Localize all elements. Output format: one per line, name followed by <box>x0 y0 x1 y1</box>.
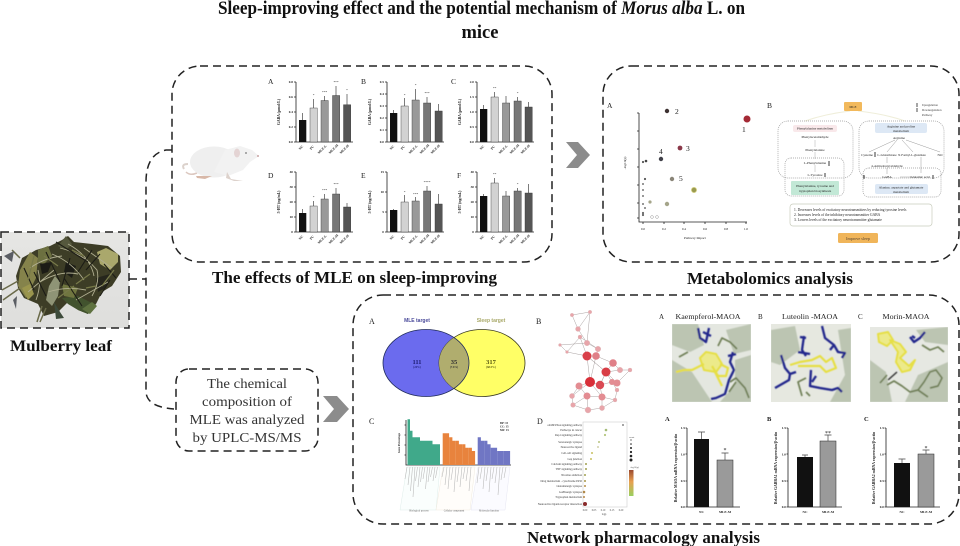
pathway diagram: 1. Decreases levels of excitatory neurotransmitters by reducing tyrosine levels <box>794 208 907 212</box>
bar chart: A GABA: MLE-H <box>339 143 350 155</box>
bar chart: GABRA1 expression: B <box>767 416 772 423</box>
venn diagram: MLE target <box>404 318 430 324</box>
KEGG dot plot: Neuroactive ligand <box>561 446 583 449</box>
bar chart: C GABA: MLE-H <box>520 143 531 155</box>
KEGG dot plot: Cell-cell signaling <box>561 452 583 455</box>
bar chart: GABRA1 expression: 1.0 <box>782 452 786 456</box>
pathway diagram: Glutamic acid <box>910 175 930 179</box>
bar chart: MAOA expression: NC <box>699 510 704 514</box>
bar chart: C GABA: NC <box>479 144 486 151</box>
pathway diagram: MLE <box>849 105 857 109</box>
KEGG dot plot: D <box>537 417 543 426</box>
pathway diagram: Phenylalanine metabolism <box>797 126 833 130</box>
pathway diagram: 2. Increases levels of the inhibitory neurotransmitter GABA <box>794 213 881 217</box>
bar chart: GABRA1 expression: 0.5 <box>782 479 786 483</box>
venn diagram: 35 <box>451 359 458 366</box>
venn diagram: (24%) <box>413 366 421 369</box>
bar chart: MAOA expression: 0.5 <box>681 479 685 483</box>
pathway diagram: Phenylalanine <box>805 148 825 152</box>
docking titles: A <box>659 313 664 321</box>
bar chart: D 5-HT: D <box>268 171 274 180</box>
network graph <box>536 310 632 413</box>
pathway diagram: Pathway <box>922 113 933 117</box>
bar chart: E 5-HT: PC <box>400 234 406 241</box>
bar chart: E 5-HT: 15 <box>381 170 384 174</box>
bar chart: D 5-HT: MLE-M <box>328 233 340 245</box>
venn diagram <box>369 317 525 396</box>
network graph: B <box>536 317 541 326</box>
scatter plot: pathway impact: 2 <box>675 107 679 116</box>
KEGG dot plot: Neuroactive ligand-receptor interaction <box>538 503 583 506</box>
bar chart: A GABA: PC <box>309 144 315 151</box>
pathway diagram: L-Tyrosine <box>807 173 823 177</box>
enrichment bar chart: Biological process <box>409 510 429 512</box>
pathway diagram: B <box>767 101 772 110</box>
scatter plot: pathway impact: 1.0 <box>744 227 748 231</box>
KEGG dot plot: Glutamatergic synapse <box>556 485 583 488</box>
enrichment bar chart: CC: 15 <box>500 426 509 428</box>
bar chart: B GABA: *** <box>424 91 430 95</box>
scatter plot: pathway impact <box>607 101 750 240</box>
pathway diagram: Improve sleep <box>846 236 870 241</box>
bar chart: E 5-HT: 10 <box>381 190 384 194</box>
bar chart: C GABA: 1.5 <box>470 95 474 99</box>
pathway diagram: tryptophan biosynthesis <box>799 189 832 193</box>
scatter plot: pathway impact: A <box>607 101 613 110</box>
KEGG dot plot: Calcium signaling pathway <box>551 463 583 466</box>
bar chart: B GABA <box>361 77 444 155</box>
bar chart: GABRA2 expression: 0.0 <box>880 505 884 509</box>
pathway diagram: L-Glutathione <box>877 153 897 157</box>
KEGG dot plot: Serotonergic synapse <box>558 441 583 444</box>
bar chart: MAOA expression: 1.5 <box>681 426 685 430</box>
bar chart: B GABA: B <box>361 77 366 86</box>
bar chart: E 5-HT: *** <box>413 192 418 196</box>
bar chart: MAOA expression: 1.0 <box>681 452 685 456</box>
panel: mulberry leaf photo <box>1 232 129 328</box>
bar chart: A GABA: 0.4 <box>289 110 293 114</box>
bar chart: B GABA: GABA (μmol/L) <box>368 98 372 125</box>
bar chart: MAOA expression: MLE-M <box>719 510 732 514</box>
enrichment bar chart <box>369 417 511 512</box>
scatter plot: pathway impact: 0.2 <box>662 227 666 231</box>
bar chart: D 5-HT: 10 <box>290 215 293 219</box>
bar chart: A GABA: *** <box>322 90 327 94</box>
icon: white mouse <box>183 146 259 181</box>
bar chart: E 5-HT: MLE-M <box>419 233 431 245</box>
bar chart: B GABA: MLE-L <box>408 143 419 155</box>
venn diagram: 317 <box>486 359 497 366</box>
scatter plot: pathway impact: Pathway Impact <box>684 236 706 240</box>
docking image: kaempferol <box>672 324 751 402</box>
docking image: morin <box>870 327 948 402</box>
venn diagram: Sleep target <box>477 318 506 324</box>
bar chart: A GABA: MLE-L <box>317 143 328 155</box>
bar chart: C GABA: MLE-M <box>509 143 521 155</box>
enrichment bar chart: Gene Percentage <box>398 432 401 453</box>
bar chart: B GABA: MLE-M <box>419 143 431 155</box>
pathway diagram: Phenylalanine, tyrosine and <box>796 184 834 189</box>
docking titles: Morin-MAOA <box>882 313 930 321</box>
text block: chemical composition <box>176 369 318 451</box>
bar chart: GABRA1 expression: Relative GABRA1 mRNA expression/β-actin <box>774 431 778 504</box>
heading: effects of MLE: The effects of MLE on sleep-improving <box>212 268 498 287</box>
scatter plot: pathway impact: 0.0 <box>641 227 645 231</box>
pathway diagram: GABA <box>882 175 892 179</box>
bar chart: C GABA: PC <box>490 144 496 151</box>
bar chart: F 5-HT: MLE-M <box>509 233 521 245</box>
pathway diagram: L-Phenylalanine <box>804 161 827 165</box>
text block: chemical composition: MLE was analyzed <box>190 413 304 428</box>
KEGG dot plot: Rap1 signaling pathway <box>555 434 583 437</box>
KEGG dot plot: 0.05 <box>592 509 597 512</box>
bar chart: B GABA: 0.2 <box>380 116 384 120</box>
enrichment bar chart: C <box>369 417 374 426</box>
bar chart: C GABA: 0.5 <box>470 125 474 129</box>
text block: chemical composition: The chemical <box>207 377 287 392</box>
KEGG dot plot: 0.00 <box>583 509 588 512</box>
bar chart: A GABA: 0.8 <box>289 80 293 84</box>
bar chart: F 5-HT: * <box>517 182 519 186</box>
bar chart: D 5-HT <box>268 170 353 245</box>
bar chart: F 5-HT: PC <box>490 234 496 241</box>
bar chart: F 5-HT: 20 <box>471 200 474 204</box>
bar chart: D 5-HT: 40 <box>290 170 293 174</box>
pathway diagram: Alanine, aspartate and glutamate <box>879 186 924 190</box>
text block: chemical composition: by UPLC-MS/MS <box>192 431 302 446</box>
bar chart: E 5-HT: MLE-L <box>408 233 419 245</box>
docking titles: B <box>758 313 763 321</box>
panel: metabolomics analysis <box>603 66 959 262</box>
bar chart: GABRA1 expression: 0.0 <box>782 505 786 509</box>
bar chart: MAOA expression: * <box>724 448 726 454</box>
bar chart: A GABA: *** <box>333 80 339 84</box>
bar chart: E 5-HT: * <box>404 190 406 194</box>
pathway diagram: metabolism <box>893 190 909 194</box>
bar chart: F 5-HT: NC <box>479 234 486 241</box>
bar chart: F 5-HT: MLE-H <box>520 233 531 245</box>
KEGG dot plot: logp <box>602 513 607 516</box>
pathway diagram: N-Formyl-L-glutamate <box>898 153 926 157</box>
bar chart: F 5-HT: 40 <box>471 170 474 174</box>
bar chart: F 5-HT: F <box>457 171 461 180</box>
bar chart: A GABA: 0.0 <box>289 140 293 144</box>
bar chart: C GABA <box>451 77 534 155</box>
KEGG dot plot: Nicotine addiction <box>561 474 583 477</box>
bar chart: E 5-HT: 0 <box>382 230 384 234</box>
bar chart: D 5-HT: 20 <box>290 200 293 204</box>
bar chart: F 5-HT: MLE-L <box>498 233 509 245</box>
enrichment bar chart: Cellular component <box>444 510 465 512</box>
heading: mulberry leaf: Mulberry leaf <box>10 338 113 355</box>
bar chart: GABRA2 expression <box>864 416 940 514</box>
bar chart: GABRA2 expression: NC <box>900 510 905 514</box>
bar chart: GABRA2 expression: 1.0 <box>880 452 884 456</box>
KEGG dot plot <box>537 417 639 516</box>
bar chart: A GABA: A <box>268 77 274 86</box>
bar chart: E 5-HT: NC <box>389 234 396 241</box>
bar chart: F 5-HT: 30 <box>471 185 474 189</box>
KEGG dot plot: cAMP-PKA signaling pathway <box>547 424 583 427</box>
bar chart: A GABA: NC <box>298 144 305 151</box>
bar chart: GABRA1 expression: NC <box>803 510 808 514</box>
bar chart: F 5-HT <box>457 170 534 245</box>
docking titles <box>659 313 930 321</box>
KEGG dot plot: Drug metabolism - cytochrome P450 <box>541 480 583 483</box>
bar chart: F 5-HT: 0 <box>472 230 474 234</box>
docking titles: C <box>858 313 863 321</box>
pathway diagram: Arginine and proline <box>887 124 916 128</box>
bar chart: GABRA2 expression: 0.5 <box>880 479 884 483</box>
bar chart: B GABA: PC <box>400 144 406 151</box>
bar chart: D 5-HT: 5-HT (ng/mL) <box>277 190 281 213</box>
scatter plot: pathway impact: 1 <box>742 125 746 134</box>
heading: metabolomics analysis: Metabolomics analysis <box>687 269 854 288</box>
docking titles: Luteolin -MAOA <box>782 313 838 321</box>
scatter plot: pathway impact: 5 <box>679 174 683 183</box>
bar chart: GABRA1 expression: 1.5 <box>782 426 786 430</box>
bar chart: E 5-HT: E <box>361 171 366 180</box>
bar chart: GABRA1 expression <box>767 416 842 514</box>
enrichment bar chart: MF: 15 <box>500 429 509 432</box>
bar chart: A GABA: * <box>313 93 315 97</box>
venn diagram: A <box>369 317 375 326</box>
bar chart: GABRA1 expression: MLE-M <box>822 510 835 514</box>
bar chart: GABRA2 expression: C <box>864 416 869 423</box>
enrichment bar chart: Molecular function <box>479 510 500 512</box>
bar chart: MAOA expression: Relative MAOA mRNA expression/β-actin <box>674 433 678 502</box>
bar chart: A GABA <box>268 77 353 155</box>
pathway diagram: Phenylacetaldehyde <box>801 135 829 139</box>
scatter plot: pathway impact: 4 <box>659 147 663 156</box>
bar chart: E 5-HT: **** <box>424 180 431 184</box>
KEGG dot plot: GABAergic synapse <box>559 491 583 494</box>
title <box>218 0 746 43</box>
bar chart: C GABA: MLE-L <box>498 143 509 155</box>
scatter plot: pathway impact: -log10(p) <box>623 157 627 169</box>
scatter plot: pathway impact: 3 <box>686 144 690 153</box>
bar chart: A GABA: 0.2 <box>289 125 293 129</box>
bar chart: B GABA: 0.5 <box>380 80 384 84</box>
bar chart: C GABA: 1.0 <box>470 110 474 114</box>
docking image: luteolin <box>771 324 851 402</box>
scatter plot: pathway impact: 0.8 <box>724 227 728 231</box>
bar chart: D 5-HT: 0 <box>291 230 293 234</box>
bar chart: C GABA: 2.0 <box>470 80 474 84</box>
leaf pile illustration <box>2 236 121 322</box>
bar chart: B GABA: MLE-H <box>430 143 441 155</box>
KEGG dot plot: Pathways in cancer <box>560 429 582 432</box>
bar chart: E 5-HT: MLE-H <box>430 233 441 245</box>
pathway diagram: 3. Lowers levels of the excitatory neurotransmitter glutamate <box>794 218 882 222</box>
bar chart: E 5-HT <box>361 170 444 245</box>
pathway diagram: Upregulation <box>922 103 938 107</box>
enrichment bar chart: BP: 15 <box>500 422 509 425</box>
bar chart: C GABA: * <box>517 91 519 95</box>
bar chart: B GABA: * <box>415 83 417 87</box>
KEGG dot plot: 0.10 <box>601 509 606 512</box>
bar chart: MAOA expression <box>665 416 740 514</box>
bar chart: C GABA: C <box>451 77 456 86</box>
venn diagram: (68.5%) <box>486 366 496 369</box>
pathway diagram: NO <box>938 153 943 157</box>
bar chart: A GABA: * <box>346 88 348 92</box>
bar chart: B GABA: 0.0 <box>380 140 384 144</box>
bar chart: GABRA2 expression: MLE-M <box>920 510 933 514</box>
panel: network pharmacology analysis <box>353 295 959 524</box>
bar chart: F 5-HT: ** <box>493 172 497 176</box>
bar chart: D 5-HT: * <box>313 195 315 199</box>
bar chart: B GABA: NC <box>389 144 396 151</box>
bar chart: MAOA expression: A <box>665 416 670 423</box>
KEGG dot plot: 0.20 <box>619 509 624 512</box>
KEGG dot plot: 0.15 <box>610 509 615 512</box>
bar chart: A GABA: MLE-M <box>328 143 340 155</box>
pathway diagram: metabolism <box>893 129 909 133</box>
KEGG dot plot: TNF signaling pathway <box>556 468 583 471</box>
docking titles: Kaempferol-MAOA <box>676 313 740 321</box>
bar chart: A GABA: 0.6 <box>289 95 293 99</box>
pathway diagram: Arginine <box>893 136 905 140</box>
KEGG dot plot: count <box>629 436 635 439</box>
bar chart: D 5-HT: *** <box>333 182 339 186</box>
bar chart: GABRA2 expression: * <box>924 446 928 452</box>
bar chart: B GABA: 0.1 <box>380 128 384 132</box>
KEGG dot plot: Gap junction <box>567 458 583 461</box>
bar chart: A GABA: GABA (μmol/L) <box>277 98 281 125</box>
bar chart: C GABA: 0.0 <box>470 140 474 144</box>
bar chart: F 5-HT: 10 <box>471 215 474 219</box>
bar chart: D 5-HT: PC <box>309 234 315 241</box>
bar chart: D 5-HT: MLE-H <box>339 233 350 245</box>
bar chart: E 5-HT: 5-HT (ng/mL) <box>368 190 372 213</box>
pathway diagram: Cysteine <box>861 153 873 157</box>
bar chart: B GABA: 0.3 <box>380 104 384 108</box>
bar chart: C GABA: GABA (μmol/L) <box>458 98 462 125</box>
venn diagram: 111 <box>412 359 422 366</box>
bar chart: F 5-HT: 5-HT (ng/mL) <box>458 190 462 213</box>
title: mice <box>462 23 498 43</box>
bar chart: D 5-HT: 30 <box>290 185 293 189</box>
connector lines from mulberry leaf <box>129 150 174 409</box>
pathway diagram <box>767 101 944 243</box>
bar chart: GABRA1 expression: ** <box>825 431 831 437</box>
scatter plot: pathway impact: 0.4 <box>682 227 686 231</box>
bar chart: C GABA: ** <box>493 86 497 90</box>
pathway diagram: Downregulation <box>922 108 942 112</box>
bar chart: D 5-HT: MLE-L <box>317 233 328 245</box>
bar chart: GABRA2 expression: Relative GABRA2 mRNA expression/β-actin <box>872 431 876 504</box>
bar chart: MAOA expression: 0.0 <box>681 505 685 509</box>
bar chart: B GABA: 0.4 <box>380 92 384 96</box>
KEGG dot plot: -log10(p) <box>630 466 639 469</box>
arrow: to metabolomics <box>566 142 590 168</box>
bar chart: E 5-HT: 5 <box>382 210 384 214</box>
KEGG dot plot: Tryptophan metabolism <box>555 496 583 499</box>
scatter plot: pathway impact: 0.6 <box>703 227 707 231</box>
bar chart: B GABA: * <box>404 93 406 97</box>
pathway diagram: 4-Aminobutyraldehyde <box>871 164 903 168</box>
panel: the effects of MLE on sleep-improving <box>172 66 552 262</box>
text block: chemical composition: composition of <box>202 395 292 410</box>
venn diagram: (7.6%) <box>450 366 458 369</box>
bar chart: D 5-HT: NC <box>298 234 305 241</box>
bar chart: D 5-HT: *** <box>322 188 327 192</box>
arrow: to network pharmacology <box>323 396 349 422</box>
bar chart: GABRA2 expression: 1.5 <box>880 426 884 430</box>
